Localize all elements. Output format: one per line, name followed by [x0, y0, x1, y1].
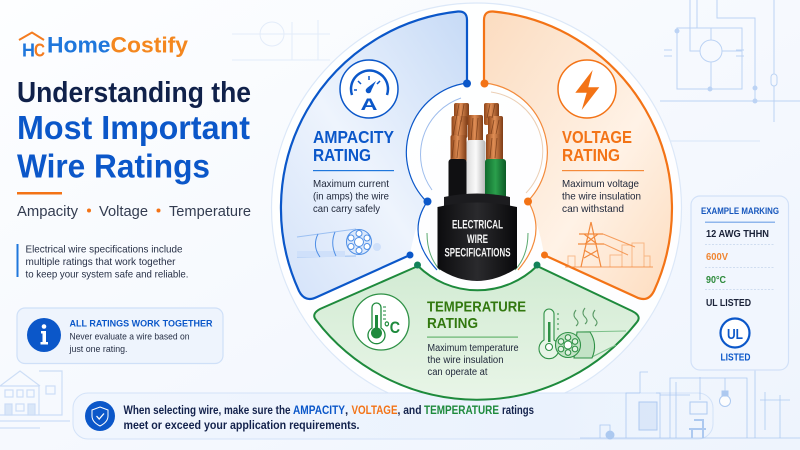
heading: AMPACITY	[313, 127, 394, 147]
icon: wire cross-section	[297, 229, 381, 257]
logo	[19, 32, 189, 60]
collar	[444, 194, 510, 217]
intro text block: multiple ratings that work together	[26, 256, 176, 268]
outer ring	[272, 3, 682, 413]
icon: house logo	[19, 32, 45, 60]
callout: all ratings work together	[17, 308, 223, 364]
bottom banner: AMPACITY	[293, 405, 345, 417]
heading	[427, 298, 526, 332]
icon: thermometer	[353, 294, 409, 350]
icon: thermometer: °C	[384, 319, 400, 337]
description: the wire insulation	[428, 355, 504, 366]
icon: gauge	[340, 60, 398, 118]
callout: all ratings work together: just one rating.	[69, 344, 128, 355]
node dots	[414, 262, 540, 268]
panel: temperature rating	[314, 233, 639, 400]
icon: UL mark: UL	[727, 326, 743, 343]
heading	[562, 127, 632, 165]
card: example marking: LISTED	[720, 352, 750, 364]
description: the wire insulation	[562, 190, 641, 202]
icon: house logo: C	[34, 40, 45, 60]
title: Most Important	[17, 109, 250, 146]
icon: UL mark	[720, 318, 750, 348]
cable label: WIRE	[467, 232, 488, 246]
card: example marking: UL LISTED	[706, 298, 751, 309]
icon: lightning bolt	[558, 60, 616, 118]
subtitle	[17, 204, 251, 220]
jacket	[438, 202, 517, 281]
heading: RATING	[562, 145, 620, 165]
callout: all ratings work together: ALL RATINGS WORK TOGETHER	[70, 318, 213, 330]
description: Maximum current	[313, 178, 389, 190]
bottom banner: ratings	[502, 405, 534, 417]
heading: RATING	[427, 315, 478, 332]
accent rule	[17, 192, 62, 194]
cable label	[444, 218, 510, 260]
heading: VOLTAGE	[562, 127, 632, 147]
description	[562, 178, 641, 215]
bottom banner: TEMPERATURE	[424, 405, 499, 417]
panel: voltage rating	[480, 11, 672, 299]
card: example marking: 600V	[706, 252, 728, 263]
heading: RATING	[313, 145, 371, 165]
title	[17, 77, 251, 184]
node dots	[406, 80, 471, 258]
card: example marking: 12 AWG THHN	[706, 229, 769, 240]
bottom banner: ,	[345, 405, 348, 417]
strand lines	[452, 104, 499, 158]
bottom banner: meet or exceed your application requirements.	[124, 420, 360, 432]
card: example marking	[691, 196, 788, 370]
bottom banner: VOLTAGE	[352, 405, 398, 417]
bottom banner	[73, 393, 713, 439]
description: can withstand	[562, 203, 624, 215]
title: Wire Ratings	[17, 148, 210, 184]
heading	[313, 127, 394, 165]
bottom banner: When selecting wire, make sure the	[124, 405, 290, 417]
description: (in amps) the wire	[313, 190, 389, 202]
icon: gauge: A	[360, 95, 378, 114]
bottom banner: , and	[398, 405, 422, 417]
icon: info	[27, 318, 61, 352]
intro text block: to keep your system safe and reliable.	[26, 268, 188, 280]
description: can operate at	[428, 367, 488, 378]
panel: ampacity rating	[281, 11, 471, 299]
icon: house logo: H	[22, 40, 35, 60]
house illustration	[0, 371, 70, 428]
copper strands	[450, 103, 503, 162]
description	[313, 178, 389, 215]
heading: TEMPERATURE	[427, 298, 526, 316]
blueprint: top right	[660, 0, 800, 141]
subtitle: Ampacity	[17, 204, 79, 220]
intro text block	[16, 244, 188, 280]
description: Maximum temperature	[428, 343, 519, 354]
insulated wires	[448, 159, 466, 199]
logo wordmark: HomeCostify	[47, 32, 189, 58]
description	[428, 343, 519, 378]
node dots	[480, 80, 548, 258]
cable label: SPECIFICATIONS	[444, 246, 510, 260]
subtitle: Temperature	[169, 204, 251, 220]
subtitle: Voltage	[99, 204, 148, 220]
icon: transmission tower	[565, 222, 653, 267]
callout: all ratings work together: Never evaluate a wire based on	[70, 332, 190, 342]
icon: shield	[85, 401, 115, 431]
cable label: ELECTRICAL	[452, 218, 503, 232]
blueprint: top left	[232, 20, 330, 60]
blueprint: bottom right	[580, 370, 800, 439]
cable illustration	[438, 103, 517, 281]
description: can carry safely	[313, 203, 381, 215]
icon: hot wire with thermometer	[539, 308, 626, 359]
card: example marking: 90°C	[706, 275, 726, 286]
description: Maximum voltage	[562, 178, 639, 190]
intro text block: Electrical wire specifications include	[26, 244, 183, 256]
title: Understanding the	[17, 77, 251, 109]
card: example marking: EXAMPLE MARKING	[701, 206, 779, 216]
